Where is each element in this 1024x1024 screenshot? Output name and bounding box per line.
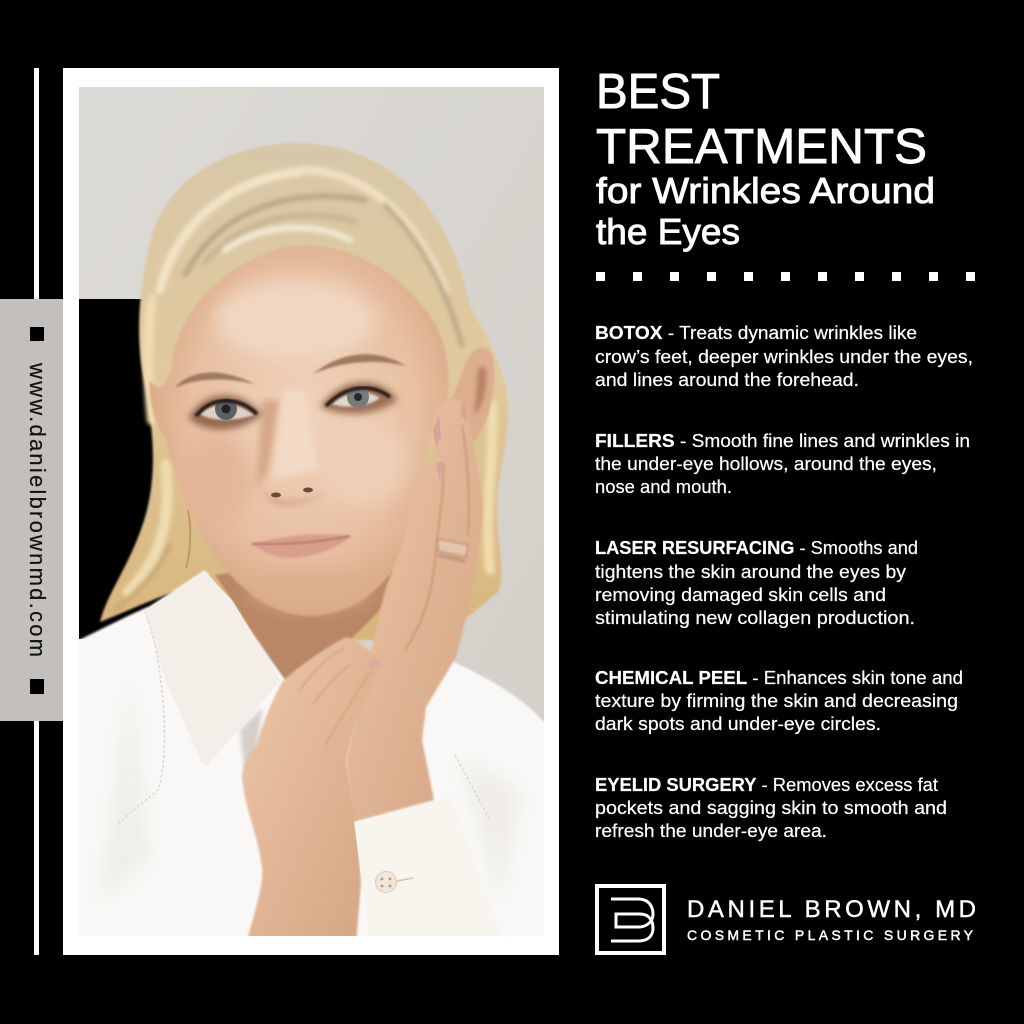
- treatment: botox: [595, 323, 973, 390]
- left vertical line, upper: [34, 68, 39, 299]
- treatment: laser resurfacing: [595, 538, 918, 628]
- brand name: [687, 896, 976, 943]
- brand tagline: COSMETIC PLASTIC SURGERY: [687, 927, 974, 943]
- treatment: fillers: the under-eye hollows, around the eyes,: [595, 454, 937, 474]
- treatment: eyelid surgery: EYELID SURGERY - Removes excess fat: [595, 775, 938, 795]
- treatment: fillers: nose and mouth.: [595, 477, 732, 497]
- title: TREATMENTS: [596, 120, 927, 174]
- hair: [100, 143, 508, 640]
- nose: [256, 390, 324, 504]
- treatment: fillers: FILLERS - Smooth fine lines and wrinkles in: [595, 431, 970, 451]
- title: BEST: [596, 65, 720, 119]
- treatment: eyelid surgery: [595, 775, 947, 841]
- treatment: botox: BOTOX - Treats dynamic wrinkles like: [595, 323, 917, 343]
- shirt shadow folds: [238, 709, 264, 767]
- cuff button: [376, 872, 413, 892]
- photo backdrop: [79, 87, 544, 723]
- title: for Wrinkles Around: [596, 170, 935, 211]
- treatment: chemical peel: [595, 668, 963, 734]
- left eye: [188, 395, 262, 430]
- black backdrop panel: [79, 299, 175, 639]
- treatment: laser resurfacing: stimulating new collagen production.: [595, 608, 915, 628]
- logo mark: [597, 886, 664, 953]
- brand name: DANIEL BROWN, MD: [687, 896, 976, 923]
- left hand knuckle shading: [300, 648, 370, 745]
- cuff: [354, 808, 408, 882]
- ear: [452, 348, 494, 445]
- treatment: laser resurfacing: removing damaged skin cells and: [595, 585, 886, 605]
- right eye: [320, 382, 398, 414]
- face: [150, 245, 448, 616]
- photo frame: [63, 68, 559, 955]
- treatment: eyelid surgery: pockets and sagging skin to smooth and: [595, 798, 947, 818]
- title: the Eyes: [596, 211, 740, 252]
- treatment: laser resurfacing: LASER RESURFACING - Smooths and: [595, 538, 918, 558]
- website side strip: [0, 299, 63, 721]
- treatment: eyelid surgery: refresh the under-eye area.: [595, 821, 827, 841]
- shirt body: [79, 569, 544, 936]
- square bullet top: [30, 327, 44, 341]
- collar: [145, 572, 281, 766]
- left hand nail: [368, 659, 380, 670]
- treatment: chemical peel: CHEMICAL PEEL - Enhances skin tone and: [595, 668, 963, 688]
- treatment: laser resurfacing: tightens the skin around the eyes by: [595, 562, 906, 582]
- neck: [215, 570, 392, 680]
- cheek and forehead light: [215, 280, 375, 360]
- treatment: chemical peel: dark spots and under-eye circles.: [595, 714, 881, 734]
- treatment: botox: and lines around the forehead.: [595, 370, 859, 390]
- treatment: botox: crow’s feet, deeper wrinkles under the eyes,: [595, 347, 973, 367]
- title: [596, 65, 935, 252]
- shirt placket edge: [116, 612, 164, 825]
- right hand and forearm: [346, 399, 483, 822]
- left hand: [242, 637, 382, 945]
- treatment: fillers: [595, 431, 970, 497]
- ring: [438, 539, 468, 563]
- dotted divider: [596, 272, 975, 281]
- fingernails: [433, 402, 467, 482]
- portrait photo illustration: [79, 87, 544, 936]
- right eyebrow: [313, 354, 406, 374]
- square bullet bottom: [30, 679, 44, 694]
- treatment: chemical peel: texture by firming the skin and decreasing: [595, 691, 958, 711]
- finger separations: [405, 425, 469, 650]
- left vertical line, lower: [34, 721, 39, 955]
- earring: [186, 510, 190, 568]
- website url: www.danielbrownmd.com: [25, 362, 50, 657]
- lips: [250, 534, 352, 558]
- left eyebrow: [175, 372, 254, 388]
